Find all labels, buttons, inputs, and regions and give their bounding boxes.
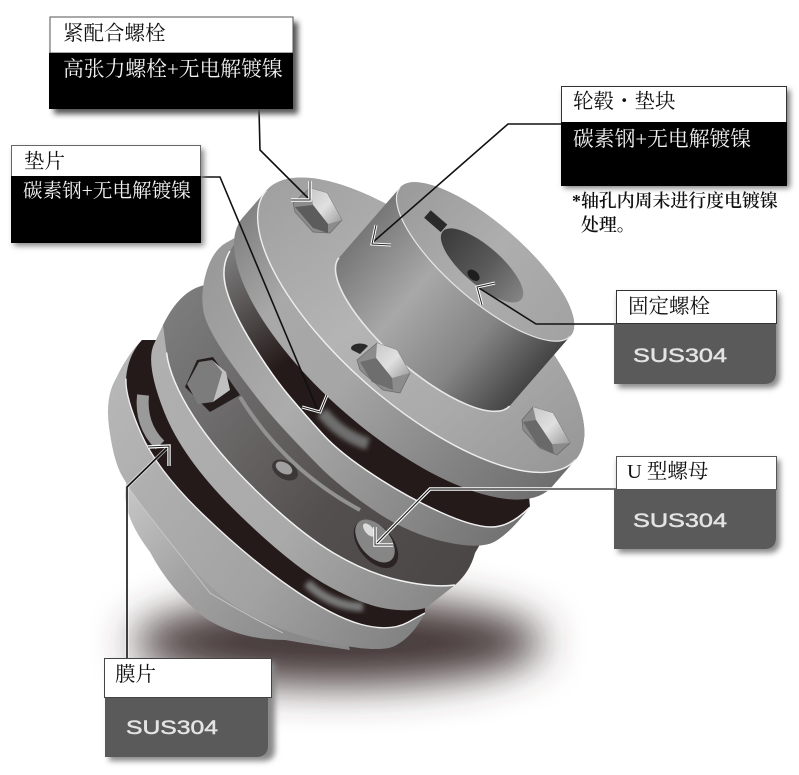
callout: u nut: SUS304: [633, 511, 728, 532]
leader: hub: [372, 124, 561, 245]
nut upper left: [185, 357, 240, 412]
coupling product image: [108, 94, 660, 650]
callout: hub and spacer: 轮毂・垫块: [573, 90, 676, 113]
plate 1 and hub: [190, 94, 660, 547]
spacer tube: [163, 285, 500, 586]
leader: tight bolt: [259, 109, 310, 200]
callout: hub and spacer: 碳素钢+无电解镀镍: [573, 128, 751, 151]
callout: gasket: [11, 146, 204, 246]
plate 2: [202, 235, 530, 546]
footnote: *轴孔内周未进行度电镀镍: [572, 191, 778, 211]
u nut: [345, 512, 407, 576]
callout: u nut: U 型螺母: [627, 460, 708, 483]
plate 3: [151, 325, 455, 610]
leader: set screw: [477, 283, 614, 324]
plate 4 highlight: [126, 378, 425, 628]
callout: hub and spacer: [561, 86, 790, 188]
callout: gasket: 垫片: [24, 150, 65, 173]
callout: gasket: 碳素钢+无电解镀镍: [23, 180, 191, 202]
callout: set screw: 固定螺栓: [628, 295, 710, 318]
diaphragm lower highlight: [307, 583, 363, 607]
callout: tight-fit bolt: [49, 17, 298, 114]
footnote: [572, 191, 778, 235]
footnote: 处理。: [581, 215, 635, 235]
leader: diaphragm: [127, 446, 169, 658]
gap 2: [126, 340, 425, 628]
bolt middle: [351, 343, 410, 393]
callout: diaphragm: SUS304: [126, 718, 219, 739]
bolt top: [293, 188, 342, 233]
leader: u nut: [375, 489, 616, 545]
callout: diaphragm: [104, 658, 275, 761]
gap 1: [224, 235, 530, 527]
callout: tight-fit bolt: 高张力螺栓+无电解镀镍: [63, 58, 283, 81]
leader: gasket: [200, 177, 327, 412]
plate 4: [108, 340, 425, 649]
callout: u nut: [614, 456, 780, 553]
hub and plate 4 seam: [127, 487, 283, 633]
callout: set screw: [614, 290, 780, 388]
nut middle: [268, 455, 302, 485]
ground shadow: [133, 599, 543, 685]
back hub: [125, 480, 350, 650]
plate 3 highlight: [166, 352, 455, 586]
plate 2 highlight: [224, 251, 530, 527]
gap highlight: [322, 412, 368, 444]
callout: set screw: SUS304: [633, 346, 728, 367]
diaphragm ring: [240, 397, 360, 510]
callout: tight-fit bolt: 紧配合螺栓: [63, 22, 166, 45]
diaphragm highlight: [143, 395, 160, 445]
callout: diaphragm: 膜片: [115, 663, 156, 686]
bolt right: [522, 407, 570, 455]
